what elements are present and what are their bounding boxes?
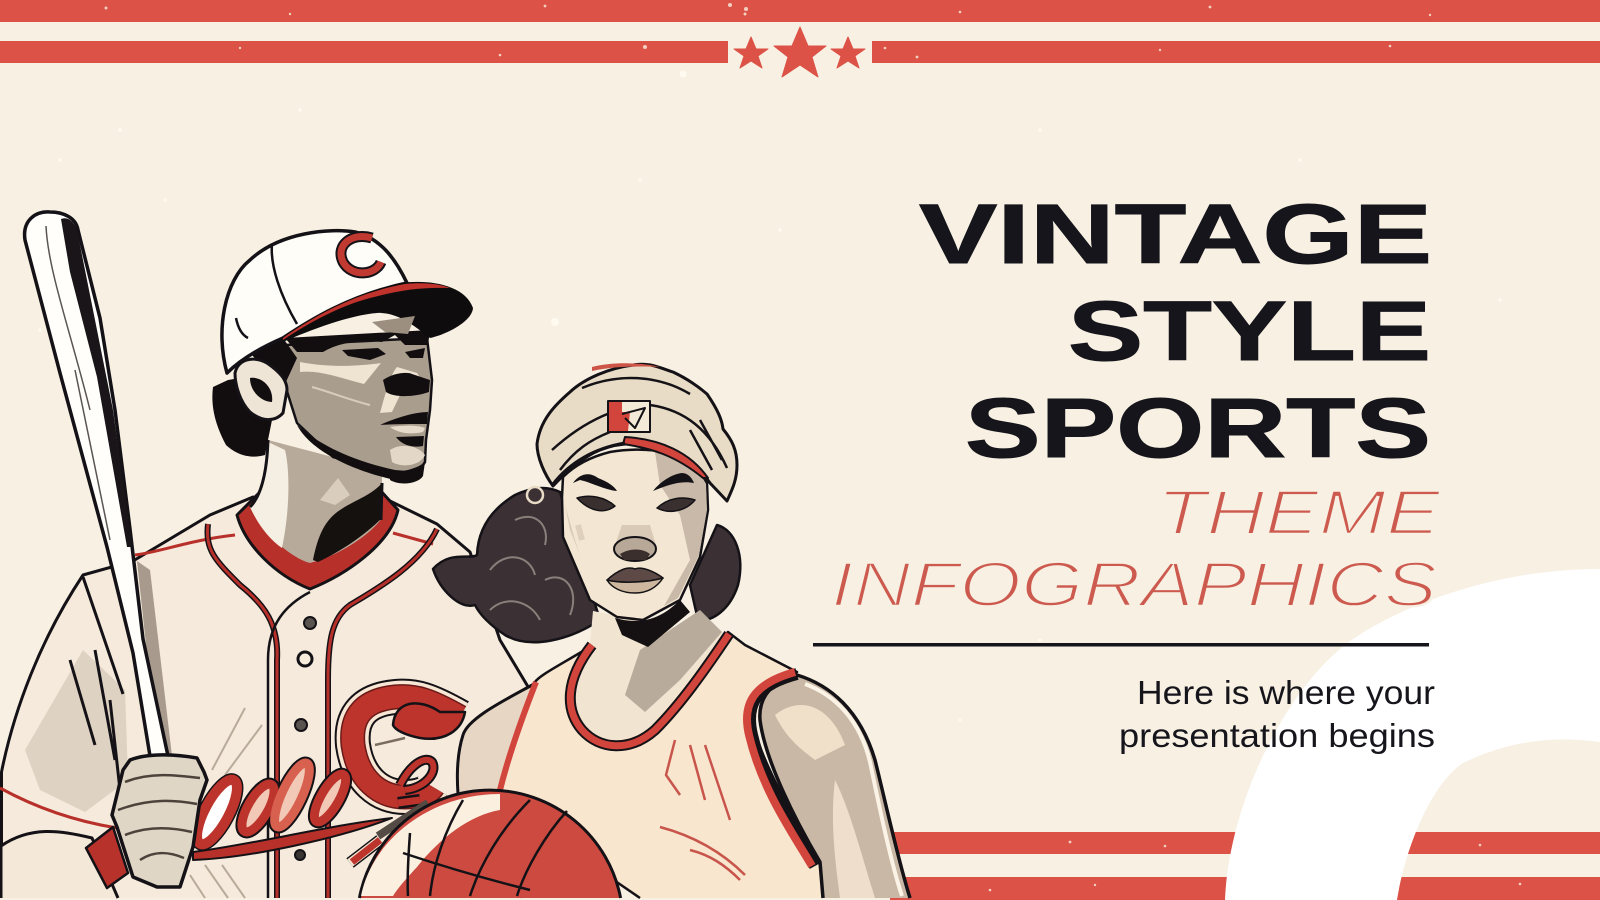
face <box>285 338 432 480</box>
left shoulder <box>457 684 534 815</box>
jersey piping <box>207 524 437 898</box>
title <box>919 187 1432 475</box>
basketball <box>359 790 621 898</box>
jersey body <box>2 497 530 898</box>
cheek highlight <box>300 362 381 384</box>
tank marks <box>660 740 745 880</box>
logo swirl <box>393 703 465 739</box>
left hair curls <box>433 487 600 642</box>
jersey fold hatching <box>190 708 262 898</box>
white arch shape <box>1225 569 1600 900</box>
background paint specks <box>38 70 1502 722</box>
headband strip <box>552 363 727 484</box>
baseball bat <box>25 212 168 756</box>
tank top <box>497 632 823 898</box>
title: VINTAGE <box>919 187 1432 281</box>
right arm <box>760 675 910 898</box>
script red letters <box>190 759 351 849</box>
neck and chest <box>575 611 725 740</box>
back hair <box>212 378 272 457</box>
baseball cap <box>222 231 473 373</box>
illustration: basketball player <box>350 363 910 898</box>
jersey script <box>190 759 351 849</box>
lower lip <box>390 426 425 433</box>
collar trim <box>570 634 729 746</box>
chin highlight <box>390 446 425 465</box>
under-chin shadow <box>615 600 690 647</box>
icon: three stars <box>734 27 865 77</box>
left trim <box>500 682 536 790</box>
forearm <box>1 831 118 898</box>
cheek streak <box>312 387 370 405</box>
script swoosh <box>193 818 392 860</box>
jersey buttons <box>295 617 316 860</box>
tagline: Here is where your <box>1137 674 1435 711</box>
neck light patch <box>320 478 350 505</box>
collar <box>237 490 398 589</box>
neck shade <box>625 610 722 712</box>
ear <box>235 359 287 420</box>
tagline <box>1119 674 1435 754</box>
divider line <box>813 643 1429 646</box>
face <box>562 450 708 620</box>
subtitle: theme infographics: INFOGRAPHICS <box>831 550 1437 620</box>
bottom stripes <box>880 832 1600 900</box>
nose highlight <box>380 367 425 413</box>
subtitle: theme infographics <box>831 478 1441 620</box>
hair around ear <box>252 338 297 384</box>
headband wrap <box>537 364 737 501</box>
title: SPORTS <box>965 381 1431 475</box>
subtitle: theme infographics: THEME <box>1157 478 1441 548</box>
tagline: presentation begins <box>1119 717 1435 754</box>
logo inner loop <box>375 738 433 790</box>
batting hand <box>112 755 207 887</box>
neck highlight <box>250 442 288 548</box>
jersey logo C <box>353 697 460 797</box>
wristband <box>86 827 128 888</box>
neck outline <box>250 440 382 520</box>
title: STYLE <box>1068 284 1431 378</box>
neck <box>250 440 382 563</box>
fingers <box>350 800 428 863</box>
facial details <box>285 330 430 483</box>
headband badge <box>608 401 650 432</box>
right hair curls <box>690 525 740 620</box>
neck shadow <box>313 483 382 562</box>
top stripes <box>0 0 1600 63</box>
illustration: baseball player <box>0 212 530 898</box>
armhole trim <box>747 672 815 866</box>
sleeve shading <box>0 533 433 828</box>
